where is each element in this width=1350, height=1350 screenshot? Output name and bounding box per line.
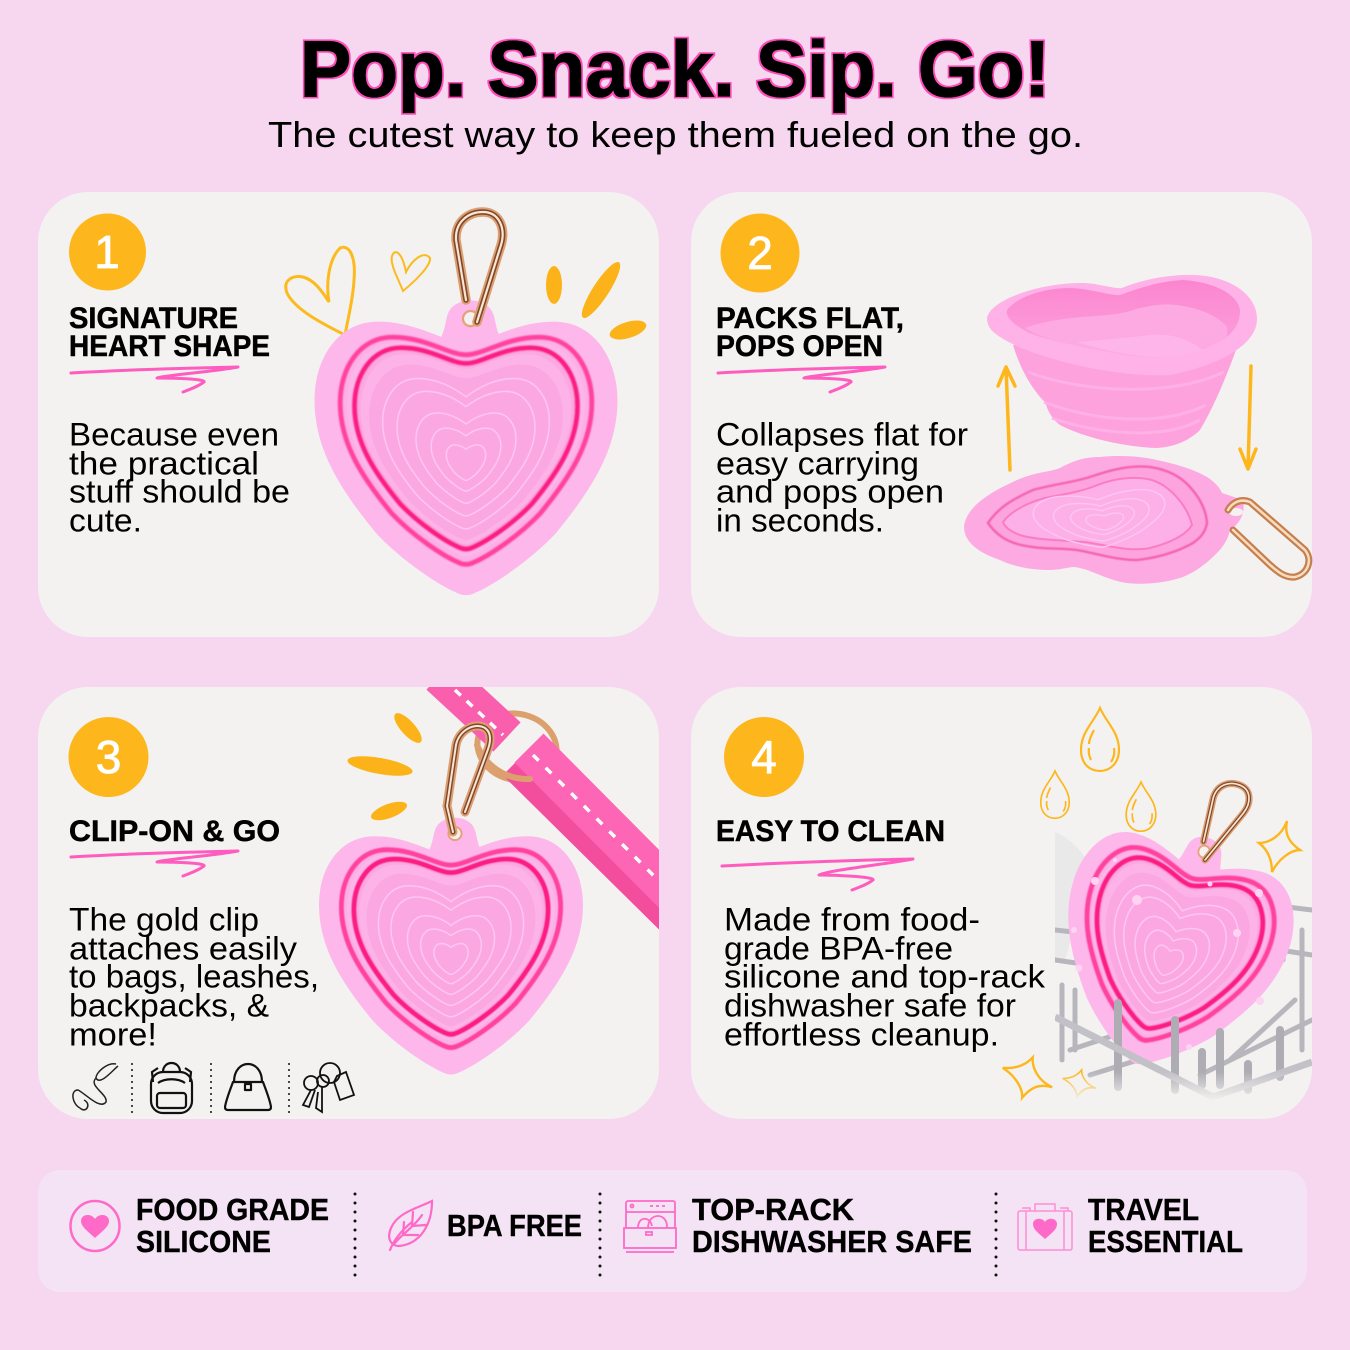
icon: small doodle heart [392,252,430,291]
heading [69,302,270,363]
icon: large doodle heart [286,247,354,335]
number badge 2: 2 [747,227,773,279]
arrow: down [1240,366,1256,469]
body text: The gold clip [69,902,259,938]
arrow: up [998,367,1015,470]
body text: to bags, leashes, [69,958,319,994]
heading: HEART SHAPE [69,330,270,363]
number badge 3: 3 [96,731,121,783]
icon: keys [303,1063,354,1112]
icon: handbag [225,1064,271,1110]
icon: sparkles [1000,821,1300,1100]
body text: easy carrying [716,446,919,482]
dotted dividers [355,1194,996,1276]
feature: top-rack dishwasher safe [692,1192,972,1259]
pink squiggle underline [722,859,913,890]
feature: food grade silicone: FOOD GRADE [136,1192,329,1227]
feature: food grade silicone [136,1192,329,1259]
feature: travel essential: TRAVEL [1088,1192,1199,1227]
gold clip [447,726,490,832]
heading: CLIP-ON & GO [69,815,280,848]
body text: Made from food- [724,902,980,938]
body text: effortless cleanup. [724,1016,999,1052]
body text: stuff should be [69,474,290,510]
bottom feature bar [38,1170,1307,1292]
flat collapsed heart with clip [964,456,1309,584]
heading: POPS OPEN [716,330,883,363]
dotted dividers [132,1064,289,1113]
pink squiggle underline [71,367,238,392]
body text: and pops open [716,474,944,510]
icon: burst marks [546,258,649,343]
icon: suitcase [1018,1204,1072,1250]
body text: in seconds. [716,502,884,538]
icon: water drops [1041,708,1156,831]
icon: backpack [151,1063,192,1113]
heading: SIGNATURE [69,302,238,335]
heading: EASY TO CLEAN [716,815,945,848]
number badge 1 [69,214,146,290]
number badge 1: 1 [94,226,120,278]
heart silicone cup with clip [314,212,618,595]
body text: the practical [69,446,259,482]
body text: Because even [69,416,279,452]
number badge 3 [68,717,148,797]
body text [69,416,290,538]
panel: packs flat, pops open [691,192,1312,637]
body text: grade BPA-free [724,930,953,966]
body text: more! [69,1016,157,1052]
body text [716,416,968,538]
body text: cute. [69,502,142,538]
dish rack back [1055,832,1312,1075]
icon: heart in circle [70,1201,120,1251]
body text: silicone and top-rack [724,958,1046,994]
icon: dishwasher [624,1201,676,1252]
body text: backpacks, & [69,988,269,1024]
feature: travel essential: ESSENTIAL [1088,1224,1243,1259]
icon: burst marks [346,709,426,824]
open heart bowl [987,275,1257,448]
body text [69,902,319,1052]
pink squiggle underline [71,851,238,876]
title: Pop. Snack. Sip. Go! [300,24,1050,113]
dish rack front [1055,1003,1312,1102]
leash strap and ring [426,687,659,930]
body text [724,902,1046,1052]
subtitle: The cutest way to keep them fueled on the go. [268,114,1083,155]
feature: travel essential [1088,1192,1243,1259]
heading: PACKS FLAT, [716,302,904,335]
heart silicone cup [319,818,583,1074]
number badge 4 [724,717,804,797]
number badge 4: 4 [751,731,777,783]
feature: food grade silicone: SILICONE [136,1224,271,1259]
number badge 2 [720,214,800,292]
pink squiggle underline [718,367,885,392]
panel: easy to clean [691,687,1313,1119]
heading [716,302,904,363]
wet heart cup with clip [1028,778,1313,1097]
icon: leaf [389,1201,432,1250]
feature: BPA free: BPA FREE [447,1208,582,1243]
panel: signature heart shape [38,192,659,637]
feature: top-rack dishwasher safe: DISHWASHER SAFE [692,1224,972,1259]
body text: dishwasher safe for [724,988,1016,1024]
body text: attaches easily [69,930,297,966]
icon: leash [73,1064,118,1110]
body text: Collapses flat for [716,416,968,452]
panel: clip-on and go [38,675,690,1119]
feature: top-rack dishwasher safe: TOP-RACK [692,1192,855,1227]
